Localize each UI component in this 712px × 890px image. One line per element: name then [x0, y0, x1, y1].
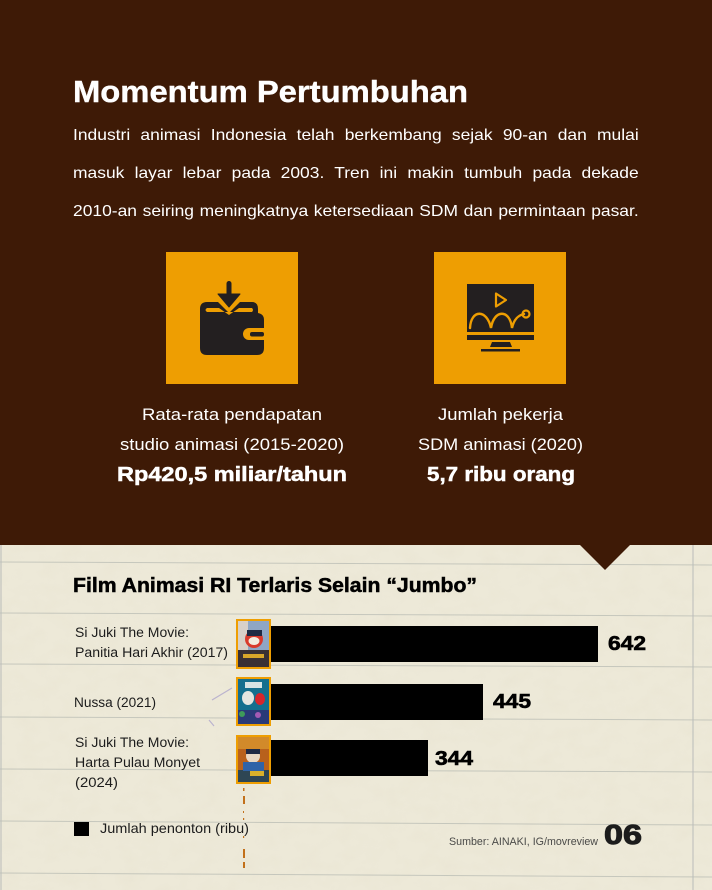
bar: Si Juki Panitia Hari Akhir	[75, 625, 646, 662]
text block: studio revenue: Rp420,5 miliar/tahun	[117, 463, 347, 486]
text block: animation workers: SDM animasi (2020)	[418, 436, 583, 454]
poster: Si Juki 2024	[236, 735, 271, 784]
bar: Si Juki Harta Pulau Monyet: Harta Pulau Monyet	[75, 755, 200, 770]
text block: animation workers	[418, 406, 583, 486]
icon: monitor with animation	[434, 252, 566, 384]
chart heading: Film Animasi RI Terlaris Selain “Jumbo”	[73, 575, 477, 597]
intro paragraph: masuk layar lebar pada 2003. Tren ini makin tumbuh pada dekade	[73, 165, 639, 182]
panel: dark brown header	[0, 0, 712, 570]
title: Momentum Pertumbuhan	[73, 74, 468, 109]
text block: studio revenue	[117, 406, 347, 486]
poster: Nussa	[236, 677, 271, 726]
intro paragraph	[73, 127, 639, 220]
panel: paper background	[0, 545, 712, 890]
bar: Si Juki Panitia Hari Akhir: Si Juki The Movie:	[75, 625, 189, 640]
bar: Nussa: Nussa (2021)	[74, 695, 156, 710]
bar chart	[74, 619, 646, 790]
bar: Si Juki Panitia Hari Akhir: Panitia Hari Akhir (2017)	[75, 645, 228, 660]
bar: Si Juki Harta Pulau Monyet: (2024)	[75, 775, 118, 790]
intro paragraph: Industri animasi Indonesia telah berkembang sejak 90-an dan mulai	[73, 127, 639, 144]
legend: Jumlah penonton (ribu)	[100, 820, 249, 836]
icon: wallet with arrow	[166, 252, 298, 384]
text block: studio revenue: studio animasi (2015-2020)	[120, 436, 344, 454]
text block: animation workers: 5,7 ribu orang	[427, 463, 575, 486]
bar: Si Juki Panitia Hari Akhir: 642	[608, 633, 646, 655]
bar: Nussa	[74, 684, 531, 720]
bar: Si Juki Harta Pulau Monyet: Si Juki The Movie:	[75, 735, 189, 750]
source note: Sumber: AINAKI, IG/movreview	[449, 836, 598, 848]
bar: Si Juki Harta Pulau Monyet	[75, 735, 474, 790]
poster: Si Juki 2017	[236, 619, 271, 669]
page number: 06	[604, 819, 642, 850]
bar: Nussa: 445	[493, 691, 531, 713]
bar: Si Juki Harta Pulau Monyet: 344	[435, 748, 474, 770]
text block: animation workers: Jumlah pekerja	[438, 406, 564, 424]
text block: studio revenue: Rata-rata pendapatan	[142, 406, 322, 424]
intro paragraph: 2010-an seiring meningkatnya ketersediaan SDM dan permintaan pasar.	[73, 203, 639, 220]
